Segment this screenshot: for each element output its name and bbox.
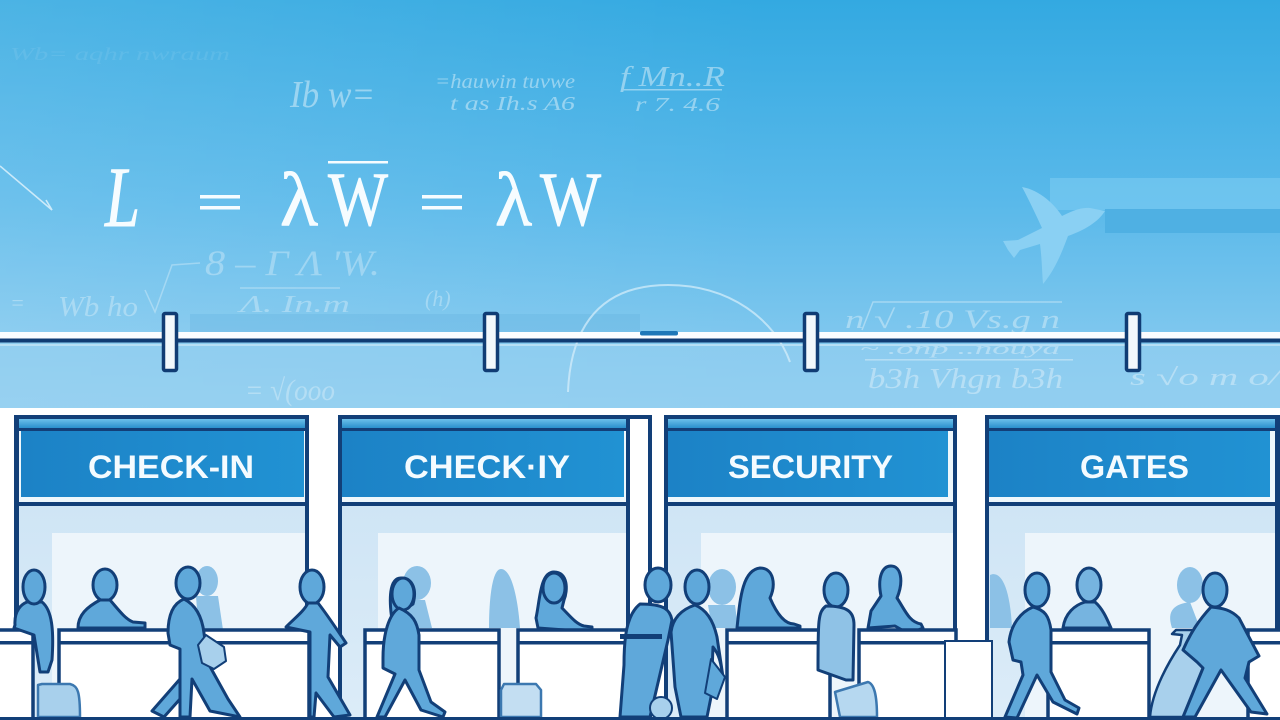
passenger: standing man with suitcase, security — [818, 573, 877, 717]
sign: security — [668, 431, 948, 497]
faint formula top: r 7. 4.6 — [635, 94, 720, 116]
seated agent: security woman 2 — [868, 566, 923, 634]
panel: gates booth — [985, 415, 1280, 720]
seated agent: check-in — [78, 569, 145, 628]
panel: security booth — [664, 415, 957, 720]
passenger: walker, right of check-in — [286, 570, 350, 717]
counter 2 — [59, 630, 309, 720]
faint formula left of rail — [10, 243, 451, 407]
background ghost passengers — [196, 566, 1203, 650]
faint formula left of rail: (h) — [425, 286, 451, 311]
sign: gates: GATES — [1080, 449, 1189, 485]
faint text line top left: Wb= aqhr nwraum — [10, 44, 230, 64]
suitcase: check-ty — [501, 684, 541, 717]
background: sky blue math backdrop — [0, 0, 1280, 410]
passenger: walker, gates — [1005, 573, 1079, 718]
sign: check-ty — [342, 431, 624, 497]
counter 8 — [1048, 630, 1149, 720]
companion dog and luggage, gates — [1150, 630, 1206, 717]
passenger: walker with bag, check-in — [152, 567, 240, 717]
faint formula top — [289, 62, 725, 116]
faint formula right of rail: b3h Vhgn b3h — [868, 364, 1063, 395]
floor line — [0, 717, 1280, 720]
main formula: L = lambda W-bar = lambda W: λ — [495, 158, 532, 242]
faint formula top: t as Ih.s A6 — [450, 93, 575, 115]
seated agent: check-ty — [536, 572, 592, 632]
passenger: walker with satchel, gates — [1183, 573, 1267, 717]
sign: check-in: CHECK-IN — [88, 449, 254, 485]
counter row — [0, 630, 1280, 720]
faint formula left of rail: Λ. In.m — [237, 292, 350, 318]
counter 5 — [727, 630, 830, 720]
main formula: L = lambda W-bar = lambda W: λ — [280, 158, 318, 242]
faint arc — [568, 285, 790, 392]
passenger: walker, check-ty — [377, 578, 445, 717]
main formula: L = lambda W-bar = lambda W: L — [104, 149, 140, 245]
terminal wall — [0, 408, 1280, 720]
faint formula top: Ib w= — [289, 74, 375, 116]
faint formula left of rail: Wb ho — [58, 292, 138, 323]
post 3 — [804, 314, 818, 370]
faint formula left of rail: = √(ooo — [245, 374, 335, 407]
counter 7 — [945, 641, 992, 720]
rail with posts — [0, 314, 1280, 370]
faint arrow stroke left — [0, 166, 52, 210]
counter 3 — [365, 630, 499, 720]
main formula: L = lambda W-bar = lambda W — [104, 149, 601, 245]
sign: check-in — [21, 431, 304, 497]
passenger: front group at security — [620, 568, 672, 719]
sign: gates — [989, 431, 1270, 497]
sign: security: SECURITY — [728, 449, 893, 485]
seated agent: gates — [1063, 568, 1111, 628]
counter 1 — [0, 630, 33, 720]
panel: check-in booth — [14, 415, 309, 720]
main formula: L = lambda W-bar = lambda W: W — [540, 158, 601, 242]
faint formula right of rail — [845, 302, 1280, 395]
faint formula left of rail: 8 – Γ Λ 'W. — [205, 243, 380, 283]
sign: check-ty: CHECK·IY — [404, 449, 570, 485]
faint formula top: f Mn..R — [620, 62, 725, 93]
counter 9 — [1248, 630, 1280, 720]
faint formula right of rail: ~ .onp ..nouya — [860, 339, 1060, 358]
counter 6 — [859, 630, 956, 720]
seated agent: security woman 1 — [737, 568, 800, 628]
faint formula left of rail: = — [10, 290, 25, 315]
icon: airplane silhouette — [1003, 187, 1105, 284]
passenger: walker at security — [671, 570, 725, 717]
post 4 — [1126, 314, 1140, 370]
faint formula top: =hauwin tuvwe — [435, 71, 575, 93]
panel: check-in 2 booth — [338, 415, 652, 720]
counter 4 — [518, 630, 630, 720]
main formula: L = lambda W-bar = lambda W: W — [328, 158, 388, 242]
post 2 — [484, 314, 498, 370]
passenger: standing left with suitcase — [14, 570, 80, 717]
post 1 — [164, 314, 176, 370]
faint formula right of rail: s √o m o/ — [1130, 365, 1280, 391]
rail marker — [640, 331, 678, 336]
faint formula right of rail: n √ .10 Vs.g n — [845, 305, 1060, 334]
